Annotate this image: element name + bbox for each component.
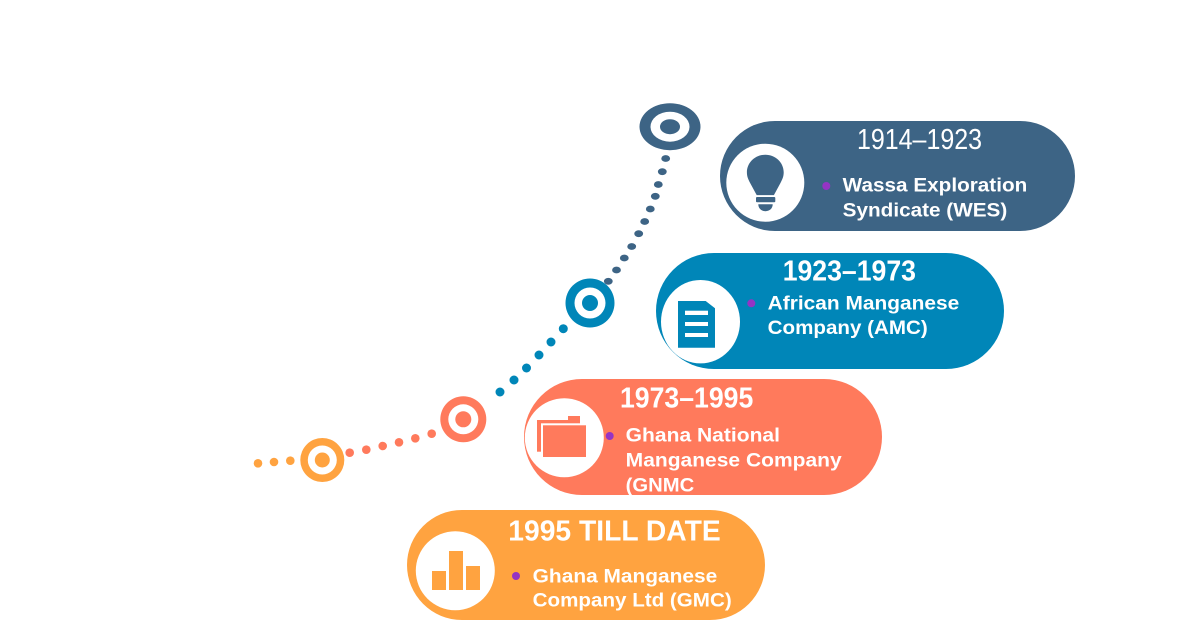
icon: light bulb bbox=[726, 144, 804, 222]
company name: Ghana Manganese bbox=[533, 565, 717, 587]
dotted path: blue segment bbox=[496, 324, 568, 396]
milestone marker: orange bbox=[300, 438, 344, 482]
pill background bbox=[720, 121, 1075, 231]
company name: African Manganese bbox=[768, 292, 959, 314]
pill background bbox=[656, 253, 1004, 369]
milestone marker: navy bbox=[640, 103, 700, 150]
company name: Company (AMC) bbox=[768, 317, 928, 339]
company name: Ghana National bbox=[626, 425, 780, 447]
dotted path: coral segment bbox=[345, 429, 436, 457]
period heading: 1914–1923 bbox=[857, 124, 982, 156]
company name: (GNMC bbox=[626, 475, 694, 497]
bullet bbox=[512, 572, 520, 580]
pill background bbox=[524, 379, 882, 495]
company name bbox=[626, 425, 842, 497]
bullet bbox=[747, 299, 755, 307]
company name: Wassa Exploration bbox=[843, 175, 1027, 197]
panel: 1973-1995 bbox=[524, 379, 882, 497]
pill background bbox=[407, 510, 765, 620]
panel: 1914-1923 bbox=[720, 121, 1075, 231]
period heading: 1923–1973 bbox=[783, 256, 916, 288]
company name bbox=[533, 565, 732, 612]
panel: 1923-1973 bbox=[656, 253, 1004, 369]
period heading: 1995 TILL DATE bbox=[508, 516, 721, 548]
company name: Syndicate (WES) bbox=[843, 200, 1007, 222]
panel: 1995 till date bbox=[407, 510, 765, 620]
dotted path: orange segment bbox=[254, 456, 295, 468]
icon: bar chart bbox=[416, 531, 495, 610]
company name bbox=[843, 175, 1027, 222]
company name: Company Ltd (GMC) bbox=[533, 590, 732, 612]
company name bbox=[768, 292, 959, 339]
icon: folders bbox=[525, 398, 604, 477]
company name: Manganese Company bbox=[626, 450, 842, 472]
bullet bbox=[822, 182, 830, 190]
dotted path: navy segment bbox=[604, 155, 670, 285]
period heading: 1973–1995 bbox=[620, 383, 753, 415]
milestone marker: coral bbox=[440, 396, 486, 442]
icon: document bbox=[661, 280, 740, 363]
milestone marker: blue bbox=[566, 278, 614, 328]
bullet bbox=[606, 432, 614, 440]
